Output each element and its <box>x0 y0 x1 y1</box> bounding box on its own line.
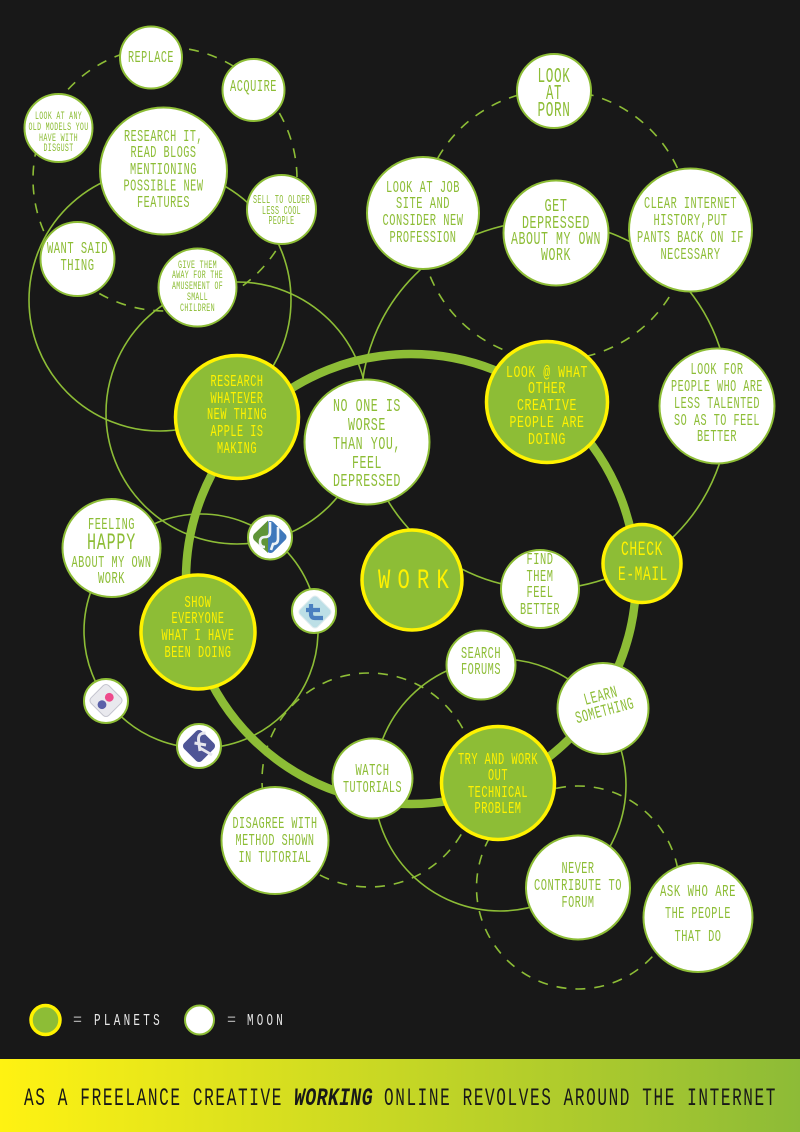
planet: work <box>362 530 462 630</box>
moon: feeling happy <box>62 499 160 597</box>
moon: disagree with method <box>222 787 328 894</box>
moon: get depressed: DEPRESSED <box>522 214 590 234</box>
moon: watch tutorials <box>332 738 412 818</box>
orbit: look at others solid <box>361 221 729 589</box>
moon: ask who are the people <box>644 863 752 972</box>
moon: look at porn: PORN <box>538 100 570 123</box>
moon: sell to older <box>247 175 316 244</box>
moon: get depressed: WORK <box>541 246 571 266</box>
moon: no one is worse: NO ONE IS <box>333 397 401 417</box>
moon: clear internet history <box>629 168 752 292</box>
orbit: top-right dashed <box>420 90 690 360</box>
orbit: social networks <box>84 514 318 748</box>
moon: search forums: SEARCH <box>461 645 501 664</box>
planet: check email: CHECK <box>621 539 663 562</box>
planet: look at other creatives <box>486 342 608 462</box>
moon: no one is worse: DEPRESSED <box>333 472 401 492</box>
legend <box>31 1006 286 1034</box>
moon: learn something: LEARN <box>582 684 620 711</box>
moon: never contribute: CONTRIBUTE TO <box>534 877 622 896</box>
planet: look at other creatives: OTHER <box>528 380 566 399</box>
moon: look at old models: HAVE WITH <box>39 133 78 145</box>
planet: technical problem: PROBLEM <box>474 800 522 819</box>
moon: sell to older: LESS COOL <box>262 205 301 218</box>
legend: planets label: PLANETS <box>94 1012 163 1031</box>
planet: research apple: MAKING <box>217 440 257 459</box>
moon: clear internet history: NECESSARY <box>660 246 720 265</box>
moon: give them away: AWAY FOR THE <box>172 270 223 282</box>
moon: never contribute <box>526 836 630 940</box>
moon: give them away <box>158 248 236 326</box>
planet: technical problem <box>442 726 554 840</box>
moon: sell to older: SELL TO OLDER <box>253 194 310 207</box>
moon: acquire <box>222 59 284 121</box>
moon: feeling happy: WORK <box>98 570 125 589</box>
moon: research it <box>100 108 227 234</box>
icon: twitter <box>292 589 336 633</box>
moon: clear internet history: CLEAR INTERNET <box>644 195 737 214</box>
planet: look at other creatives: LOOK @ WHAT <box>506 364 588 383</box>
moon: want said thing <box>40 222 114 296</box>
moon: feeling happy: ABOUT MY OWN <box>72 554 152 573</box>
moon: look for less talented <box>660 348 774 464</box>
planet: show everyone: SHOW <box>184 594 212 613</box>
moon: look at porn: LOOK <box>538 66 570 89</box>
moon: find them feel better: FIND <box>526 551 554 570</box>
moon: feeling happy: FEELING <box>88 516 135 535</box>
moon: feeling happy: HAPPY <box>87 530 136 556</box>
moon: look at old models: LOOK AT ANY <box>35 111 82 123</box>
moon: no one is worse: FEEL <box>352 454 382 474</box>
moon: never contribute: NEVER <box>562 860 594 879</box>
moon: look at old models: OLD MODELS YOU <box>28 122 88 134</box>
footer banner <box>0 1059 800 1132</box>
moon: replace <box>120 26 182 88</box>
moon: learn something: SOMETHING <box>574 695 637 729</box>
moon: look for less talented: LOOK FOR <box>690 361 744 380</box>
moon: find them feel better: FEEL <box>526 584 554 603</box>
planet: look at other creatives: PEOPLE ARE <box>510 414 584 433</box>
moon: look at job site: PROFESSION <box>390 229 456 248</box>
moon: look at job site: SITE AND <box>396 195 450 214</box>
moon: look at job site: CONSIDER NEW <box>382 212 464 231</box>
orbit: research solid <box>29 169 291 431</box>
moon: find them feel better: THEM <box>526 568 554 587</box>
icon: flickr <box>84 679 128 723</box>
moon: research it: POSSIBLE NEW <box>124 178 204 196</box>
moon: ask who are the people: ASK WHO ARE <box>660 883 736 902</box>
moon: look at porn <box>517 54 591 128</box>
moon: replace: REPLACE <box>128 49 174 68</box>
moon: learn something <box>558 663 648 754</box>
moon: look at job site <box>367 157 479 269</box>
moon: ask who are the people: THE PEOPLE <box>665 905 731 924</box>
moon: give them away: SMALL <box>187 292 208 304</box>
moon: want said thing: WANT SAID <box>47 240 108 259</box>
moon: find them feel better: BETTER <box>520 601 560 620</box>
moon: no one is worse <box>304 380 430 504</box>
main work orbit ring <box>186 354 636 804</box>
legend: planets equals sign: = <box>73 1012 82 1031</box>
footer headline: first part: AS A FREELANCE CREATIVE <box>24 1084 283 1113</box>
icon: facebook <box>177 724 221 768</box>
planet: look at other creatives: DOING <box>528 431 566 450</box>
moon: search forums <box>446 630 516 700</box>
moon: get depressed <box>504 180 608 286</box>
moon: search forums: FORUMS <box>461 661 501 680</box>
moon: look at old models <box>24 94 92 162</box>
planet: show everyone: WHAT I HAVE <box>162 627 234 646</box>
moon: disagree with method: DISAGREE WITH <box>232 815 318 834</box>
planet: research apple: RESEARCH <box>210 373 264 392</box>
moon: disagree with method: METHOD SHOWN <box>236 832 314 851</box>
planet: show everyone: EVERYONE <box>172 610 224 629</box>
moon: look for less talented: BETTER <box>697 428 737 447</box>
moon: clear internet history: HISTORY,PUT <box>654 212 728 231</box>
planet: technical problem: TECHNICAL <box>468 784 528 803</box>
moon: give them away: AMUSEMENT OF <box>172 281 223 293</box>
orbit: forum dashed <box>476 786 680 989</box>
icon: stumbleupon <box>248 516 292 560</box>
moon: sell to older: PEOPLE <box>268 215 294 228</box>
moon: disagree with method: IN TUTORIAL <box>238 849 312 868</box>
planet: research apple <box>176 356 298 478</box>
planet: show everyone: BEEN DOING <box>164 644 232 663</box>
moon: watch tutorials: WATCH <box>356 762 390 781</box>
moon: give them away: CHILDREN <box>180 303 215 315</box>
moon: ask who are the people: THAT DO <box>674 928 722 947</box>
legend: planet swatch <box>31 1006 60 1034</box>
moon: no one is worse: THAN YOU, <box>333 435 401 455</box>
moon: no one is worse: WORSE <box>348 416 386 436</box>
orbit: tutorials dashed <box>262 673 476 887</box>
footer headline: working: WORKING <box>294 1084 373 1113</box>
planet: show everyone <box>141 575 255 689</box>
moon: find them feel better <box>501 550 579 628</box>
planet: research apple: APPLE IS <box>210 423 264 442</box>
planet: research apple: NEW THING <box>207 406 267 425</box>
moon: never contribute: FORUM <box>562 894 594 913</box>
moon: acquire: ACQUIRE <box>230 78 277 97</box>
moon: get depressed: ABOUT MY OWN <box>511 230 601 250</box>
moon: watch tutorials: TUTORIALS <box>343 779 402 798</box>
moon: look at old models: DISGUST <box>44 143 74 155</box>
planet: technical problem: OUT <box>488 767 508 786</box>
moon: look at job site: LOOK AT JOB <box>386 179 460 198</box>
moon: research it: READ BLOGS <box>130 144 196 163</box>
legend: moon swatch <box>185 1006 214 1034</box>
moon: research it: RESEARCH IT, <box>124 128 203 147</box>
planet: check email <box>603 524 681 602</box>
moon: want said thing: THING <box>60 257 94 276</box>
planet: work: WORK <box>378 566 456 597</box>
legend: moon label: MOON <box>247 1012 286 1031</box>
planet: look at other creatives: CREATIVE <box>517 397 577 416</box>
legend: moon equals sign: = <box>227 1012 236 1031</box>
moon: look at porn: AT <box>546 83 562 106</box>
moon: get depressed: GET <box>544 197 568 217</box>
planet: technical problem: TRY AND WORK <box>458 751 538 770</box>
moon: give them away: GIVE THEM <box>178 260 217 272</box>
orbit: technical problem solid <box>374 659 626 911</box>
moon: research it: FEATURES <box>137 194 190 213</box>
orbit: top-left dashed <box>33 47 297 311</box>
moon: research it: MENTIONING <box>130 161 197 180</box>
orbit: research planet solid <box>106 282 368 544</box>
planet: check email: E-MAIL <box>618 564 668 587</box>
planet: research apple: WHATEVER <box>210 390 264 409</box>
